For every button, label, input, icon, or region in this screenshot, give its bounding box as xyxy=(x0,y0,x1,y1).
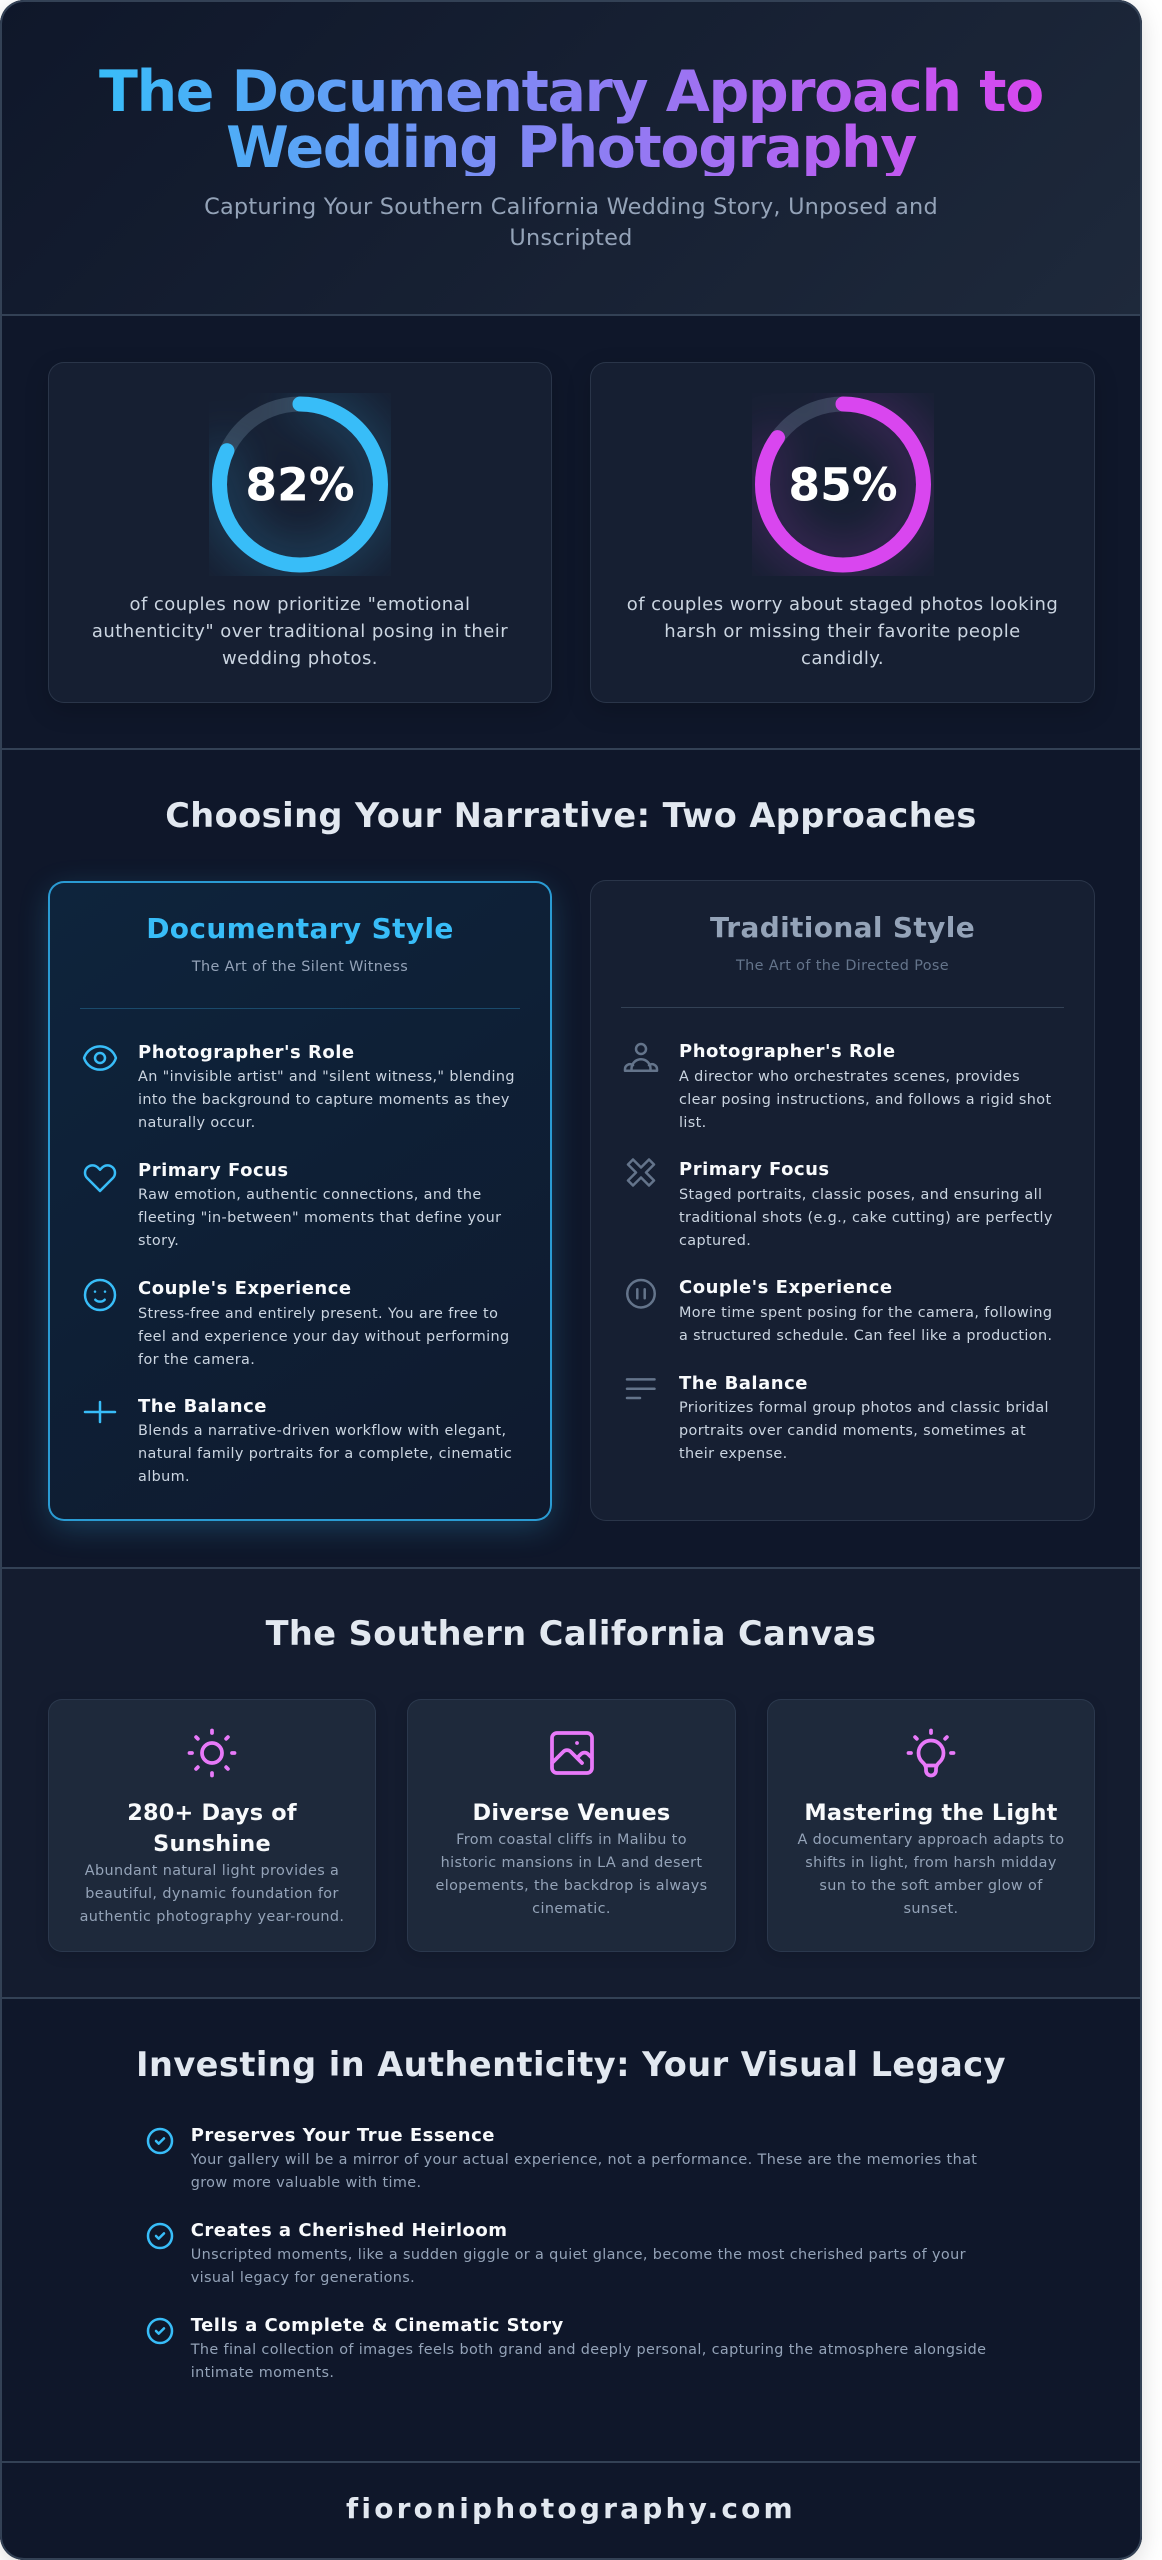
card text xyxy=(798,1800,1064,1917)
card text: 280+ Days of xyxy=(127,1800,297,1826)
card: light xyxy=(767,1699,1095,1952)
item text: Stress-free and entirely present. You are free to xyxy=(138,1306,498,1322)
item text: story. xyxy=(138,1233,179,1249)
gauge: 82 percent ring: 82% xyxy=(245,459,355,512)
benefit: true essence xyxy=(146,2124,977,2191)
benefit text xyxy=(191,2220,966,2290)
item text: An "invisible artist" and "silent witness," blending xyxy=(138,1069,515,1085)
benefit text: intimate moments. xyxy=(191,2365,334,2381)
benefit text: visual legacy for generations. xyxy=(191,2270,415,2286)
icon: light bulb xyxy=(906,1728,956,1778)
item text xyxy=(679,1159,1053,1249)
card text: beautiful, dynamic foundation for xyxy=(85,1886,339,1902)
stat description xyxy=(92,594,508,668)
benefit text xyxy=(190,2124,977,2191)
investing section xyxy=(0,1999,1142,2463)
benefit text: The final collection of images feels both grand and deeply personal, capturing the atmosphere alongside xyxy=(191,2342,986,2358)
icon: heart xyxy=(84,1164,116,1192)
section heading: canvas: The Southern California Canvas xyxy=(266,1614,876,1652)
traditional heading: Traditional Style xyxy=(710,911,975,944)
icon: check circle xyxy=(146,2222,174,2250)
item text: The Balance xyxy=(138,1396,267,1417)
icon: smile xyxy=(84,1278,116,1312)
item: primary focus xyxy=(626,1158,1053,1249)
stat description: authenticity" over traditional posing in their xyxy=(92,621,508,642)
item text xyxy=(679,1041,1052,1131)
item text: A director who orchestrates scenes, provides xyxy=(679,1069,1020,1085)
item text: natural family portraits for a complete, cinematic xyxy=(138,1446,512,1462)
stat description: of couples worry about staged photos looking xyxy=(627,594,1058,615)
item text xyxy=(679,1277,1052,1344)
icon: check circle xyxy=(146,2128,174,2154)
subtitle: Capturing Your Southern California Wedding Story, Unposed and xyxy=(204,194,938,220)
benefit: cinematic story xyxy=(144,2315,986,2386)
icon: plus xyxy=(84,1400,116,1424)
card: sunshine xyxy=(48,1699,376,1952)
documentary heading: Documentary Style xyxy=(146,912,454,945)
item text: Staged portraits, classic poses, and ensuring all xyxy=(679,1187,1042,1203)
item: couple's experience xyxy=(84,1278,510,1368)
main title: Wedding Photography xyxy=(226,115,916,181)
item text: naturally occur. xyxy=(138,1115,256,1131)
benefit text: grow more valuable with time. xyxy=(191,2175,421,2191)
card text: sun to the soft amber glow of xyxy=(819,1878,1043,1894)
gauge: 85 percent ring xyxy=(752,393,934,576)
documentary tagline: The Art of the Silent Witness xyxy=(192,959,408,975)
card text: historic mansions in LA and desert xyxy=(441,1855,702,1871)
item text xyxy=(138,1396,512,1485)
item text: Primary Focus xyxy=(138,1160,289,1181)
statistics section xyxy=(0,316,1142,750)
item text: Raw emotion, authentic connections, and the xyxy=(138,1187,482,1203)
gauge: 85 percent ring: 85% xyxy=(788,459,897,512)
item text: their expense. xyxy=(679,1446,788,1462)
icon: pause xyxy=(626,1278,656,1309)
divider xyxy=(621,1007,1064,1008)
icon: lines xyxy=(626,1378,656,1400)
stat description: of couples now prioritize "emotional xyxy=(129,594,470,615)
card text: Diverse Venues xyxy=(473,1800,670,1826)
card text: From coastal cliffs in Malibu to xyxy=(456,1832,687,1848)
benefit text xyxy=(191,2315,986,2386)
card text: authentic photography year-round. xyxy=(80,1909,344,1925)
stat card: 82 percent xyxy=(48,362,552,703)
item text: fleeting "in-between" moments that define your xyxy=(138,1210,501,1226)
header section xyxy=(0,0,1142,316)
item: photographer's role xyxy=(82,1042,515,1131)
item text: album. xyxy=(138,1469,190,1485)
item text: feel and experience your day without performing xyxy=(138,1329,510,1345)
card text xyxy=(436,1800,707,1917)
icon: outlined cross xyxy=(626,1158,656,1187)
item text xyxy=(138,1160,502,1249)
main title: The Documentary Approach to xyxy=(99,59,1043,125)
benefit text: Creates a Cherished Heirloom xyxy=(191,2220,507,2241)
item text: traditional shots (e.g., cake cutting) are perfectly xyxy=(679,1210,1053,1226)
card text: shifts in light, from harsh midday xyxy=(805,1855,1057,1871)
item text xyxy=(138,1042,515,1131)
item text: list. xyxy=(679,1115,707,1131)
card text: elopements, the backdrop is always xyxy=(436,1878,707,1894)
main title xyxy=(96,64,1046,176)
panel: documentary style xyxy=(48,881,552,1521)
benefit text: Your gallery will be a mirror of your actual experience, not a performance. These are the memories that xyxy=(191,2152,977,2168)
item text: clear posing instructions, and follows a rigid shot xyxy=(679,1092,1052,1108)
item: the balance xyxy=(84,1396,512,1485)
item text: captured. xyxy=(679,1233,751,1249)
panel: traditional style xyxy=(590,880,1095,1521)
card text: A documentary approach adapts to xyxy=(798,1832,1064,1848)
item text: portraits over candid moments, sometimes at xyxy=(679,1423,1026,1439)
icon: group xyxy=(624,1042,658,1072)
section heading: investing: Investing in Authenticity: Your Visual Legacy xyxy=(136,2044,1006,2084)
item text: for the camera. xyxy=(138,1352,255,1368)
card text xyxy=(80,1800,344,1925)
section heading: narrative: Choosing Your Narrative: Two Approaches xyxy=(165,796,977,835)
benefit text: Unscripted moments, like a sudden giggle or a quiet glance, become the most cherished parts of your xyxy=(191,2247,966,2263)
item text: Photographer's Role xyxy=(138,1042,355,1063)
footer xyxy=(0,2463,1142,2560)
subtitle: Unscripted xyxy=(509,225,633,251)
stat description: candidly. xyxy=(801,648,884,668)
benefit text: Tells a Complete & Cinematic Story xyxy=(191,2315,564,2336)
comparison section xyxy=(0,750,1142,1569)
item text: The Balance xyxy=(679,1373,808,1394)
icon: photo xyxy=(550,1731,594,1775)
item: photographer's role xyxy=(624,1041,1052,1131)
icon: eye xyxy=(82,1045,118,1071)
item: the balance xyxy=(626,1373,1049,1462)
traditional tagline: The Art of the Directed Pose xyxy=(736,958,949,974)
card: venues xyxy=(407,1699,736,1952)
icon: check circle xyxy=(144,2315,176,2347)
item text xyxy=(679,1373,1049,1462)
item text: Blends a narrative-driven workflow with elegant, xyxy=(138,1423,506,1439)
stat description xyxy=(627,594,1058,668)
item text: Couple's Experience xyxy=(679,1277,893,1298)
item text: Prioritizes formal group photos and classic bridal xyxy=(679,1400,1049,1416)
stat card: 85 percent xyxy=(590,362,1095,703)
item text: into the background to capture moments as they xyxy=(138,1092,510,1108)
stat description: harsh or missing their favorite people xyxy=(664,621,1021,642)
item text xyxy=(138,1278,510,1368)
item text: Photographer's Role xyxy=(679,1041,896,1062)
item: primary focus xyxy=(84,1160,502,1249)
subtitle xyxy=(204,194,938,251)
canvas section xyxy=(0,1569,1142,1999)
website address: fioroniphotography.com xyxy=(346,2492,796,2525)
card text: sunset. xyxy=(904,1901,958,1917)
card text: Sunshine xyxy=(153,1831,271,1857)
card text: cinematic. xyxy=(532,1901,611,1917)
gauge: 82 percent ring xyxy=(209,393,391,576)
benefit: heirloom xyxy=(146,2220,966,2286)
item: couple's experience xyxy=(626,1277,1052,1344)
item text: More time spent posing for the camera, following xyxy=(679,1305,1052,1321)
card text: Abundant natural light provides a xyxy=(85,1863,339,1879)
item text: Primary Focus xyxy=(679,1159,830,1180)
stat description: wedding photos. xyxy=(222,648,378,668)
item text: a structured schedule. Can feel like a production. xyxy=(679,1328,1052,1344)
benefit text: Preserves Your True Essence xyxy=(191,2124,495,2146)
card text: Mastering the Light xyxy=(804,1800,1058,1826)
divider xyxy=(80,1008,520,1009)
item text: Couple's Experience xyxy=(138,1278,352,1299)
icon: sun xyxy=(188,1728,236,1778)
